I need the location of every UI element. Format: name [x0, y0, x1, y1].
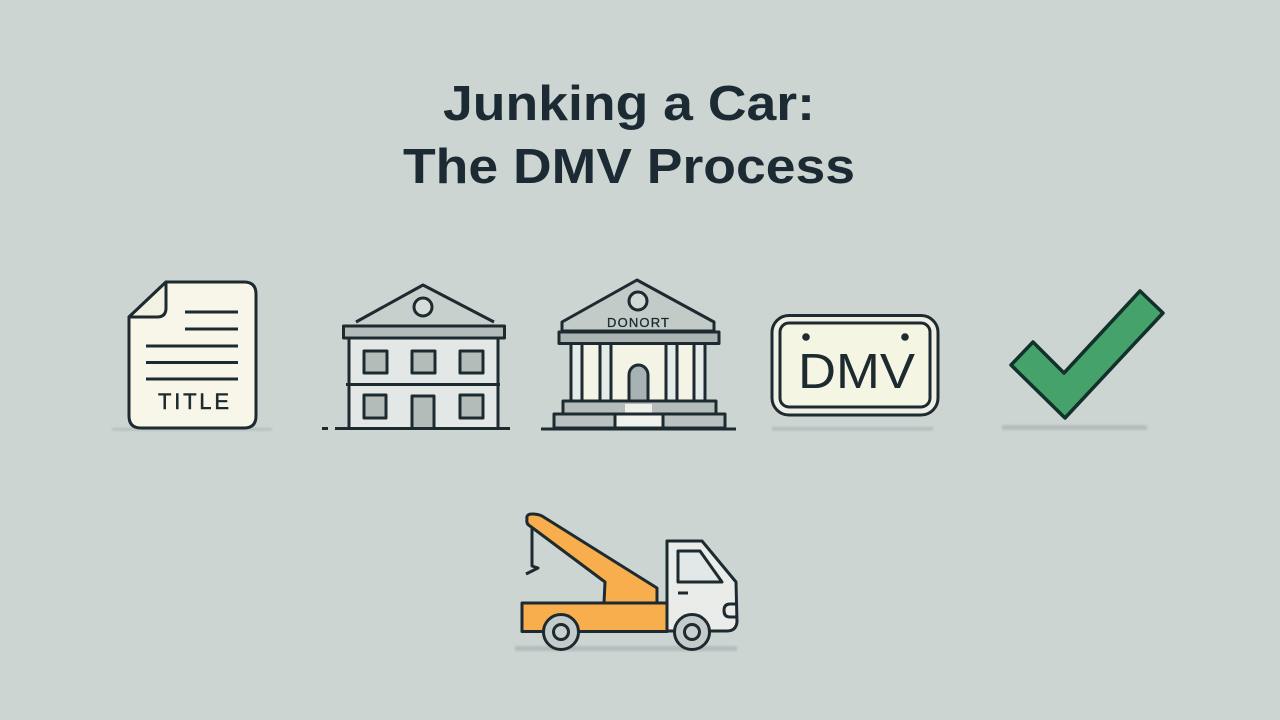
- front wheel: [674, 614, 710, 650]
- truck bed: [522, 603, 667, 632]
- icon: title document: [112, 282, 272, 430]
- icon: green check mark: [1002, 291, 1163, 430]
- truck cab: [667, 541, 737, 631]
- icon: DMV licence plate: [772, 316, 938, 430]
- rear wheel: [544, 614, 578, 650]
- courthouse inscription: DONORT: [607, 315, 669, 330]
- icon: tow truck: [515, 514, 737, 651]
- crane boom: [527, 514, 657, 603]
- title: The DMV Process: [403, 140, 855, 194]
- title: [403, 77, 855, 194]
- document label: TITLE: [158, 389, 229, 414]
- plate label: DMV: [798, 345, 915, 399]
- crane hook: [526, 528, 538, 574]
- title: Junking a Car:: [443, 77, 815, 131]
- icon: courthouse: [541, 280, 736, 429]
- icon: two-storey government building: [322, 285, 510, 428]
